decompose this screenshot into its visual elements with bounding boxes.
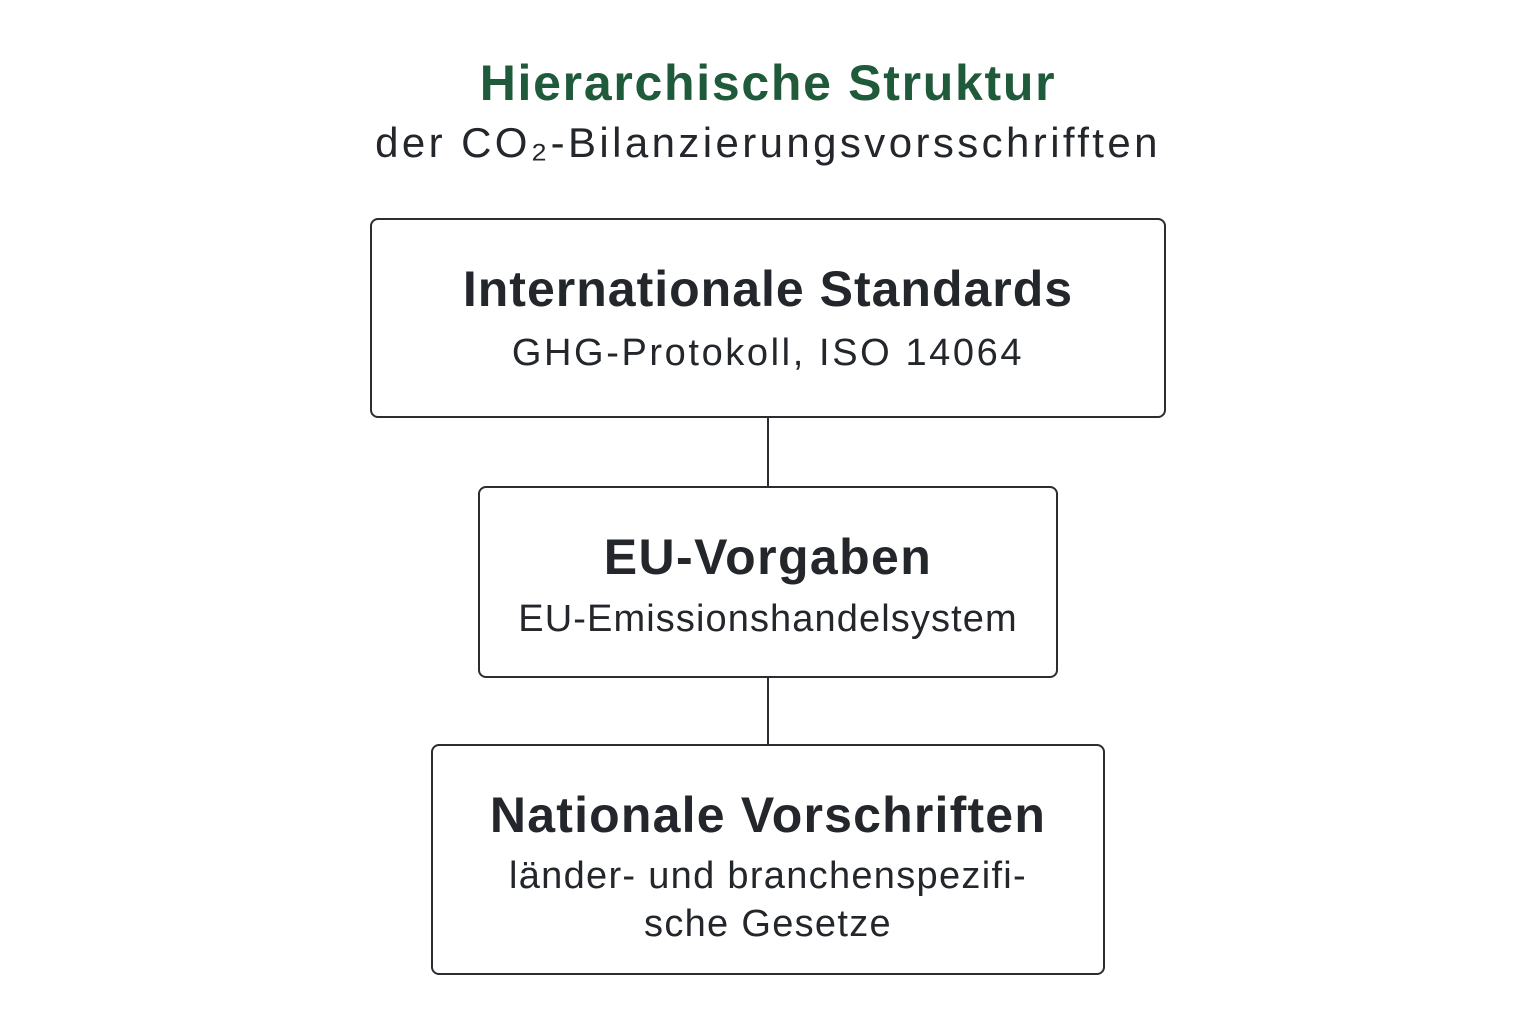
panel: international standards: [370, 218, 1166, 418]
panel: EU: [478, 486, 1058, 678]
text: [509, 855, 1027, 945]
text: GHG-Protokoll, ISO 14064: [512, 332, 1024, 374]
heading: Internationale Standards: [463, 261, 1073, 317]
subtitle: der CO₂-Bilanzierungsvorsschrifften: [375, 119, 1161, 166]
panel: national: [431, 744, 1105, 975]
title: Hierarchische Struktur: [480, 55, 1056, 111]
heading: Nationale Vorschriften: [490, 787, 1046, 843]
connector: [767, 418, 769, 486]
heading: EU-Vorgaben: [604, 529, 932, 585]
text: sche Gesetze: [644, 903, 892, 945]
connector: [767, 678, 769, 744]
text: EU-Emissionshandelsystem: [518, 598, 1018, 640]
text: länder- und branchenspezifi-: [509, 855, 1027, 897]
